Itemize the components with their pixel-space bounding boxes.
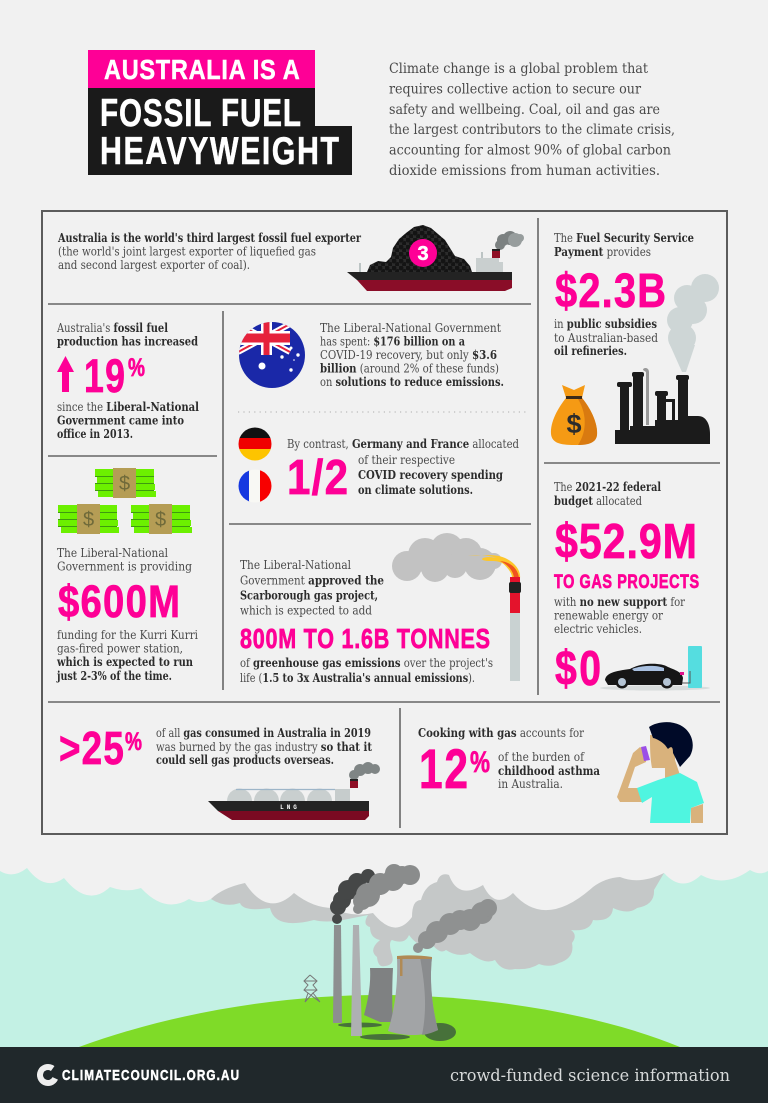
- icon: LNG ship: LNG: [280, 804, 300, 811]
- climate solutions text: of their respective: [358, 453, 455, 467]
- main frame: [42, 211, 727, 834]
- Scarborough text: Government approved the: [240, 574, 384, 588]
- funding lead text: [57, 546, 192, 574]
- statistic: $600M: $600M: [58, 576, 180, 627]
- title: [88, 50, 352, 175]
- subsidy detail text: in public subsidies: [554, 317, 657, 331]
- COVID spending text: COVID-19 recovery, but only $3.6: [320, 348, 497, 362]
- illustration: power station: [304, 864, 497, 1041]
- emissions text: of greenhouse gas emissions over the project's: [240, 656, 493, 670]
- subsidy lead text: Payment provides: [554, 245, 651, 259]
- panel: production increase: [56, 321, 199, 441]
- icon: pylon: [304, 975, 320, 1002]
- COVID spending text: billion (around 2% of these funds): [320, 362, 499, 376]
- icon: German flag: [238, 427, 272, 461]
- intro text: [389, 61, 675, 179]
- Scarborough text: [240, 558, 384, 618]
- funding lead text: The Liberal-National: [57, 546, 169, 560]
- small cooling tower: [364, 968, 393, 1022]
- statistic: 19%: 19: [84, 349, 125, 402]
- statistic: $2.3B: $2.3B: [555, 265, 666, 318]
- chimney one: [333, 925, 342, 1023]
- since 2013 text: since the Liberal-National: [57, 400, 199, 414]
- funding detail text: funding for the Kurri Kurri: [57, 628, 199, 642]
- icon: up arrow: [57, 356, 74, 392]
- illustration: sky and clouds: [0, 838, 768, 1050]
- cooking text: Cooking with gas accounts for: [418, 726, 585, 740]
- budget detail text: electric vehicles.: [554, 622, 642, 636]
- funding detail text: just 2-3% of the time.: [56, 669, 172, 683]
- funding detail text: gas-fired power station,: [57, 642, 183, 656]
- since 2013 text: office in 2013.: [57, 427, 133, 441]
- icon: money bag: $: [566, 409, 582, 439]
- budget lead text: budget allocated: [554, 494, 642, 508]
- large cooling tower: [388, 957, 438, 1035]
- statistic: 19%: %: [128, 354, 145, 382]
- panel: federal budget: [554, 480, 710, 696]
- statistic: 12%: 12: [419, 737, 468, 800]
- panel: third largest exporter: [57, 225, 524, 291]
- funding lead text: Government is providing: [57, 560, 192, 574]
- asthma text: in Australia.: [498, 777, 563, 791]
- gas consumed text: of all gas consumed in Australia in 2019: [156, 726, 371, 740]
- logo mark: [37, 1064, 59, 1086]
- statistic: 12%: [419, 737, 490, 800]
- climate solutions text: [358, 453, 503, 497]
- statistic: $52.9M: $52.9M: [555, 514, 697, 569]
- exporter text: (the world's joint largest exporter of liquefied gas: [58, 244, 316, 258]
- budget lead text: The 2021-22 federal: [554, 480, 661, 494]
- intro text: the largest contributors to the climate crisis,: [389, 122, 675, 138]
- Scarborough text: Scarborough gas project,: [240, 588, 378, 602]
- gas consumed text: was burned by the gas industry so that it: [156, 740, 372, 754]
- exporter text: and second largest exporter of coal).: [58, 258, 250, 272]
- tagline: crowd-funded science information: [450, 1066, 730, 1086]
- subsidy detail text: [554, 317, 658, 358]
- subsidy detail text: oil refineries.: [554, 344, 627, 358]
- icon: refinery: [615, 368, 710, 444]
- panel: gas burned by industry: [59, 722, 380, 820]
- asthma text: childhood asthma: [498, 764, 600, 778]
- emissions text: life (1.5 to 3x Australia's annual emissions).: [240, 671, 475, 685]
- statistic: >25%: %: [125, 728, 142, 756]
- title: FOSSIL FUEL: [100, 92, 301, 135]
- statistic: $0: $0: [555, 642, 601, 696]
- title: HEAVYWEIGHT: [100, 129, 339, 173]
- icon: refinery smoke: [667, 274, 719, 372]
- icon: gas flare: [392, 533, 521, 681]
- COVID spending text: The Liberal-National Government: [320, 321, 502, 335]
- statistic: >25%: >25: [59, 722, 124, 774]
- asthma text: [498, 750, 600, 791]
- COVID spending text: on solutions to reduce emissions.: [320, 375, 504, 389]
- production text: production has increased: [57, 334, 198, 348]
- grey smoke cloud: [205, 860, 664, 970]
- intro text: dioxide emissions from human activities.: [389, 163, 660, 179]
- icon: money stacks: $: [83, 509, 94, 531]
- budget lead text: [554, 480, 661, 508]
- climate solutions text: COVID recovery spending: [358, 468, 503, 482]
- Scarborough text: which is expected to add: [240, 604, 372, 618]
- COVID spending text: [320, 321, 504, 389]
- white cloud bank: [0, 838, 768, 928]
- to gas projects: TO GAS PROJECTS: [554, 571, 699, 593]
- shadows: [338, 1022, 456, 1041]
- illustration: green hill: [79, 995, 680, 1047]
- climate solutions text: on climate solutions.: [358, 483, 473, 497]
- intro text: Climate change is a global problem that: [389, 61, 649, 77]
- cooling tower smoke plume: [413, 899, 497, 953]
- icon: Australian flag: [238, 322, 305, 388]
- contrast text: By contrast, Germany and France allocated: [287, 437, 519, 451]
- emissions text: [240, 656, 493, 685]
- intro text: requires collective action to secure our: [389, 82, 642, 98]
- funding detail text: which is expected to run: [56, 655, 193, 669]
- chimney two: [351, 925, 362, 1036]
- statistic: 1/2: 1/2: [287, 450, 348, 505]
- mid-grey smoke plume: [353, 864, 420, 914]
- panel: childhood asthma: [418, 722, 704, 823]
- icon: electric car and charger: [600, 646, 710, 690]
- Scarborough text: The Liberal-National: [240, 558, 352, 572]
- dark smoke plume: [330, 869, 375, 924]
- footer: [0, 1047, 768, 1103]
- since 2013 text: Government came into: [57, 414, 184, 428]
- panel: Scarborough gas project: [240, 533, 521, 685]
- since 2013 text: [57, 400, 199, 441]
- intro text: safety and wellbeing. Coal, oil and gas are: [389, 102, 660, 118]
- icon: money bag: [551, 385, 597, 445]
- icon: coal ship: [347, 225, 524, 291]
- logo text: CLIMATECOUNCIL.ORG.AU: [62, 1067, 239, 1083]
- asthma text: of the burden of: [498, 750, 585, 764]
- icon: child with inhaler: [617, 722, 704, 823]
- icon: LNG ship: [208, 762, 380, 820]
- gas consumed text: [156, 726, 372, 767]
- production text: Australia's fossil fuel: [56, 321, 168, 335]
- panel: Fuel Security Service Payment: [551, 231, 719, 445]
- panel: Germany and France: [238, 427, 519, 505]
- subsidy detail text: to Australian-based: [554, 331, 658, 345]
- gas consumed text: could sell gas products overseas.: [156, 753, 334, 767]
- statistic: 19%: [84, 349, 145, 402]
- title: AUSTRALIA IS A: [104, 55, 300, 85]
- subsidy lead text: [554, 231, 694, 259]
- icon: money stacks: $: [155, 509, 166, 531]
- panel: Kurri Kurri funding: [56, 468, 199, 683]
- exporter text: Australia is the world's third largest fossil fuel exporter: [57, 231, 361, 245]
- icon: money stacks: [58, 468, 192, 534]
- intro text: accounting for almost 90% of global carbon: [389, 142, 671, 158]
- budget detail text: [554, 595, 686, 636]
- icon: coal ship: 3: [417, 243, 429, 265]
- statistic: 12%: %: [470, 746, 490, 779]
- budget detail text: with no new support for: [554, 595, 686, 609]
- exporter text: [57, 231, 361, 272]
- production text: [56, 321, 198, 348]
- budget detail text: renewable energy or: [554, 608, 664, 622]
- funding detail text: [56, 628, 199, 683]
- panel: COVID recovery: [238, 321, 504, 389]
- statistic: tonnes: 800M TO 1.6B TONNES: [240, 623, 490, 655]
- icon: French flag: [238, 469, 272, 503]
- COVID spending text: has spent: $176 billion on a: [320, 334, 465, 348]
- icon: money stacks: $: [119, 473, 130, 495]
- subsidy lead text: The Fuel Security Service: [554, 231, 694, 245]
